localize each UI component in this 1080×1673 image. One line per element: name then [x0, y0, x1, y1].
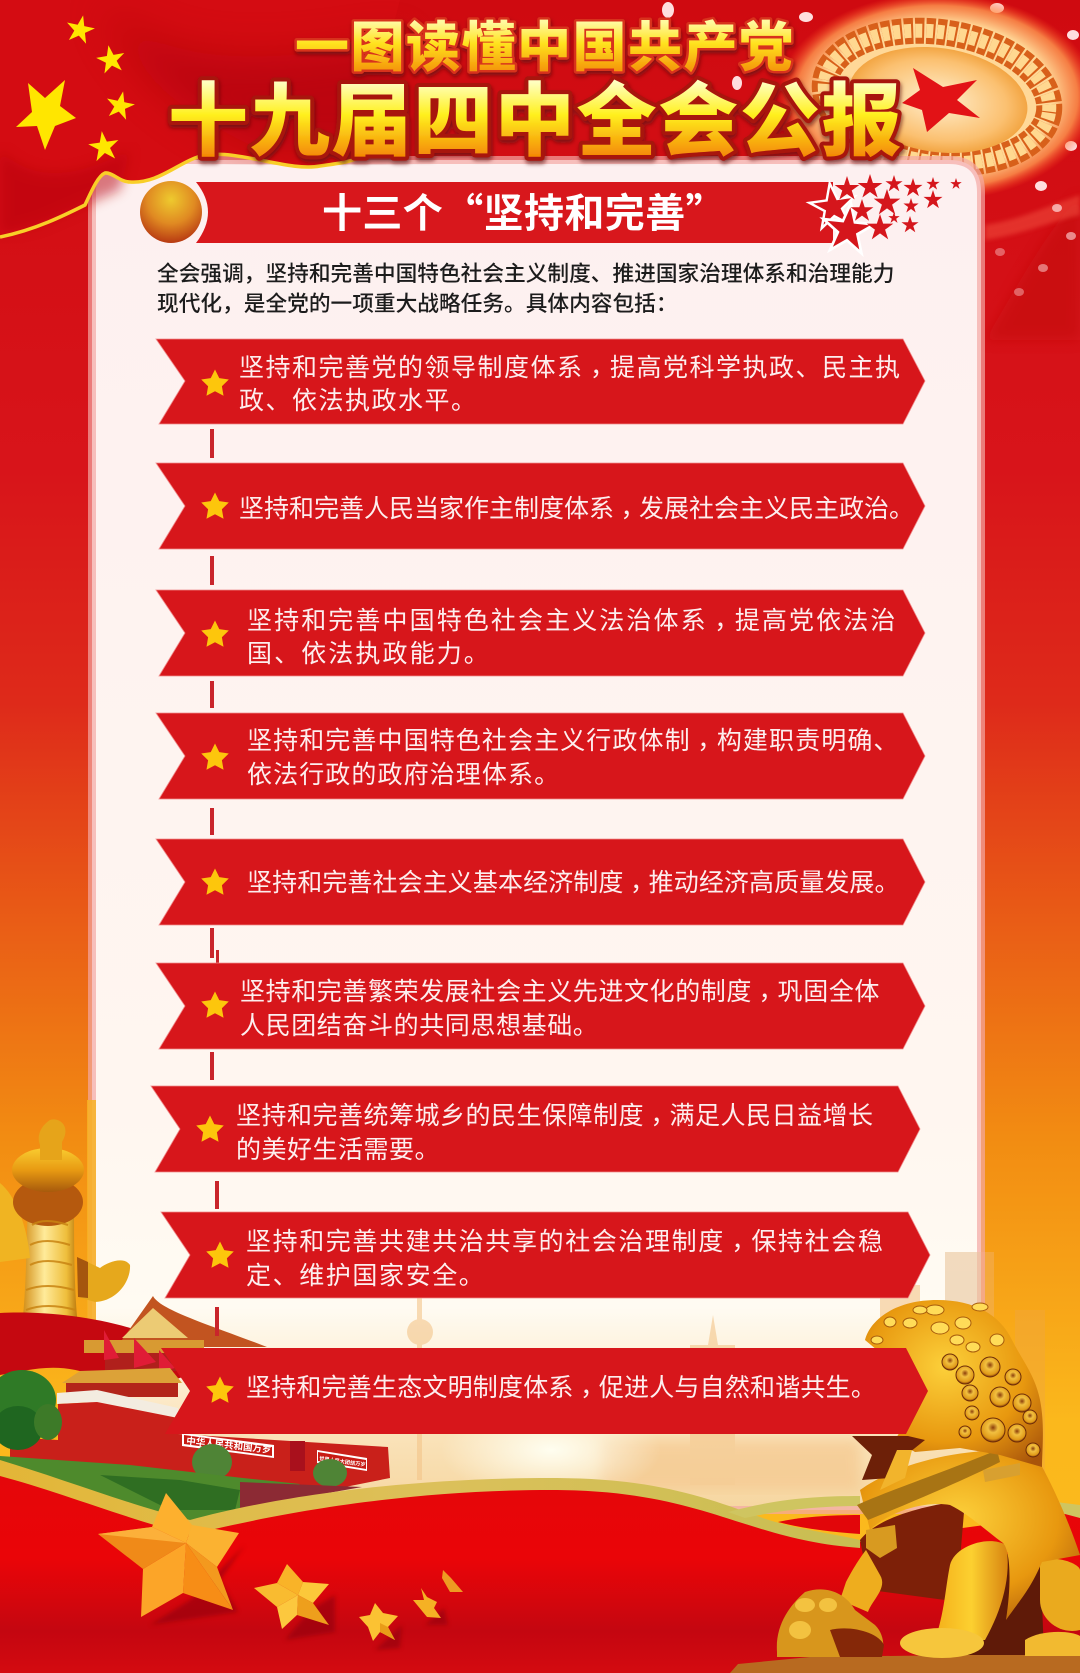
ribbon 1: [156, 339, 925, 424]
hind leg: [935, 1541, 1008, 1640]
background: lighting streaks at top right: [985, 195, 1080, 340]
text: [239, 348, 902, 417]
huabiao wing right: [77, 1257, 130, 1302]
ribbon 2: [156, 463, 925, 549]
star icon: [201, 370, 229, 396]
title line 2: 十九届四中全会公报: [168, 57, 903, 173]
slogan board left: 中华人民共和国万岁: [186, 1433, 272, 1456]
red drape: [0, 1312, 191, 1386]
main title: [168, 3, 903, 173]
text: 坚持和完善中国特色社会主义法治体系: [247, 601, 708, 637]
monument: huabiao column: [0, 1100, 130, 1330]
city skyline silhouette right: [964, 1252, 1045, 1512]
text: 坚持和完善统筹城乡的民生保障制度: [236, 1096, 644, 1132]
icon: small golden star: [359, 1603, 398, 1641]
text: 坚持和完善人民当家作主制度体系: [239, 489, 614, 525]
text: [240, 972, 880, 1042]
collar sash: [857, 1450, 1020, 1558]
star icon: [201, 620, 229, 647]
intro paragraph: 现代化，是全党的一项重大战略任务。具体内容包括：: [157, 287, 678, 318]
slogan board right: [317, 1450, 367, 1471]
text: 坚持和完善共建共治共享的社会治理制度: [246, 1222, 725, 1258]
lower roof: [62, 1368, 182, 1383]
icon: large yellow star: [16, 80, 76, 150]
star icon: [196, 1116, 224, 1142]
text: ，: [614, 496, 639, 532]
ribbon 3: [156, 590, 925, 676]
rear paw: [1025, 1559, 1080, 1656]
text: 坚持和完善生态文明制度体系: [246, 1368, 574, 1404]
text: ，: [574, 1375, 599, 1411]
mane knobs: [871, 1303, 1004, 1352]
icon: tiniest golden star: [442, 1570, 463, 1592]
icon: medium golden star: [254, 1564, 329, 1629]
lion jaw: [852, 1436, 925, 1480]
text: ，: [644, 1103, 670, 1139]
text: 定、维护国家安全。: [246, 1256, 485, 1292]
text: 提高党科学执政、民主执: [610, 348, 902, 384]
text: ，: [725, 1229, 751, 1265]
hedge garden: [0, 1456, 362, 1528]
text: 国、依法执政能力。: [247, 634, 491, 670]
stone base: [730, 1655, 1080, 1673]
ribbon 4: [156, 713, 925, 799]
emblem: golden ring with red star: [777, 0, 1080, 201]
text: [247, 721, 900, 791]
star icon: [206, 1242, 234, 1268]
panel: white content card: [92, 160, 981, 1510]
text: ，: [752, 979, 778, 1015]
mane curls: [942, 1354, 1040, 1457]
portrait: [290, 1441, 305, 1471]
star icon: [201, 492, 229, 519]
hind paw: [900, 1628, 984, 1658]
icon: red star in emblem: [902, 68, 980, 132]
intro paragraph: 全会强调，坚持和完善中国特色社会主义制度、推进国家治理体系和治理能力: [157, 257, 894, 288]
front paw: [777, 1589, 884, 1657]
star icon: [201, 992, 229, 1018]
text: 坚持和完善党的领导制度体系: [239, 348, 584, 384]
connector lines: [210, 429, 219, 1336]
text: [246, 1222, 884, 1292]
text: 满足人民日益增长: [670, 1096, 874, 1132]
heading ball: [140, 181, 202, 243]
star icon: [201, 744, 229, 770]
section heading bar: [140, 174, 962, 254]
ribbon 5: [156, 839, 925, 925]
text: 巩固全体: [778, 972, 880, 1008]
icon: small yellow stars: [64, 12, 137, 162]
text: ，: [708, 608, 735, 644]
red ground wave and gold ribbon: [0, 1460, 1080, 1673]
icon: large golden star: [98, 1493, 239, 1617]
ribbon 7: [151, 1086, 920, 1172]
text: 依法行政的政府治理体系。: [247, 755, 560, 791]
tiananmen gate: [0, 1296, 390, 1490]
chest shadow: [860, 1500, 965, 1600]
slogan board right: 世界人民大团结万岁: [319, 1454, 366, 1468]
text: [236, 1096, 874, 1166]
heading ribbon: [196, 182, 833, 243]
text: 发展社会主义民主政治。: [639, 489, 914, 525]
text: ，: [584, 355, 610, 391]
text: 推动经济高质量发展。: [649, 863, 900, 899]
star icon: [206, 1376, 234, 1403]
star shadows: [150, 1545, 448, 1650]
red wall: [10, 1402, 390, 1490]
text: 政、依法执政水平。: [239, 381, 478, 417]
sun glow: [441, 1400, 661, 1500]
ribbon 6: [156, 963, 925, 1049]
rear dark body: [960, 1550, 1044, 1655]
text: 坚持和完善社会主义基本经济制度: [247, 863, 624, 899]
trees: [0, 1370, 347, 1487]
icon: tiny golden star: [413, 1588, 441, 1618]
text: 人民团结奋斗的共同思想基础。: [240, 1006, 598, 1042]
red star cluster: [807, 174, 962, 254]
text: 促进人与自然和谐共生。: [599, 1368, 876, 1404]
huabiao wing left: [0, 1183, 30, 1262]
title line 1: 一图读懂中国共产党: [295, 3, 794, 82]
text: 提高党依法治: [735, 601, 897, 637]
text: ，: [691, 728, 717, 764]
mane: [865, 1300, 1043, 1467]
text: 坚持和完善中国特色社会主义行政体制: [247, 721, 691, 757]
text: 的美好生活需要。: [236, 1130, 440, 1166]
red flags: [104, 1330, 175, 1372]
text: [247, 601, 897, 670]
background: pale bokeh dots: [662, 2, 1079, 296]
text: 坚持和完善繁荣发展社会主义先进文化的制度: [240, 972, 752, 1008]
upper roof: [117, 1296, 267, 1347]
text: ，: [624, 870, 649, 906]
star icon: [201, 868, 229, 895]
torso: [860, 1450, 1080, 1620]
lion tongue: [880, 1450, 912, 1490]
flag: red flag with gold edge and five yellow stars: [0, 0, 400, 237]
ribbon 9: [161, 1348, 928, 1434]
text: 构建职责明确、: [717, 721, 900, 757]
front leg: [840, 1550, 882, 1612]
city silhouette inside card bottom: [407, 1252, 981, 1490]
heading text: 十三个“坚持和完善”: [322, 181, 726, 239]
ribbon 8: [161, 1212, 930, 1298]
text: 保持社会稳: [751, 1222, 884, 1258]
intro paragraph: [157, 257, 894, 318]
lion statue: [730, 1300, 1080, 1673]
